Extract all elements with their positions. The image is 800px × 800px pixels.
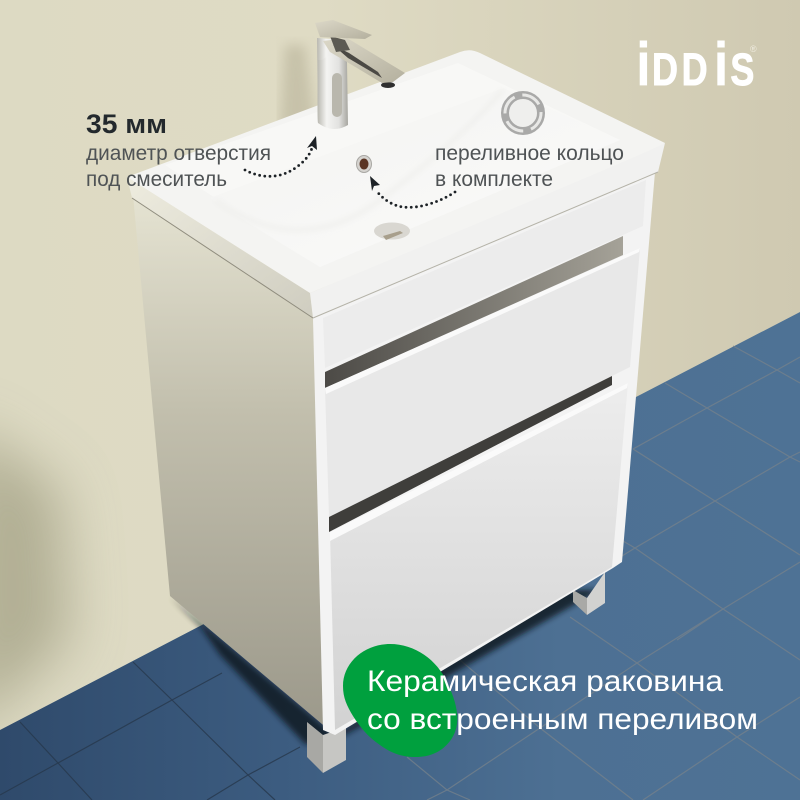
logo: iDDiS: ® [750,44,757,54]
sink rim front face [310,143,665,318]
faucet [315,20,405,129]
headline: со встроенным переливом [367,703,758,736]
faucet shadow on wall [280,45,315,130]
ceramic sink [127,50,665,318]
logo: iDDiS: D [682,44,708,95]
callout: overflow ring: переливное кольцо [435,141,624,165]
front leg [307,722,346,773]
callout: overflow ring: в комплекте [435,167,553,191]
floor with tiles [0,312,800,800]
arrow: to faucet hole [245,136,317,176]
logo: iDDiS: i [637,31,650,98]
upper handle gap [325,236,623,388]
top front panel [323,180,646,368]
cabinet [133,172,655,773]
green blob [343,644,457,757]
caption: faucet hole: диаметр отверстия [86,141,271,165]
heading: 35 mm: 35 мм [86,109,167,139]
arrow: to overflow hole [370,176,455,207]
lower drawer [330,383,628,730]
drain [374,222,410,240]
shadow under cabinet [170,590,600,745]
sink top deck [127,50,665,293]
logo: iDDiS: S [730,44,754,95]
basin [210,88,620,267]
lower handle gap [329,376,612,532]
logo: iDDiS: D [652,44,678,95]
logo: iDDiS: i [714,31,728,98]
overflow ring [505,95,541,131]
cabinet front frame [313,172,655,735]
callout: faucet hole diameter [86,109,271,191]
caption: faucet hole: под смеситель [86,167,227,191]
cabinet side panel [133,195,335,735]
upper drawer [325,248,640,517]
headline: Керамическая раковина [367,665,723,698]
overflow hole [356,156,372,172]
sink rim left face [127,177,313,318]
back right leg [573,572,605,615]
logo: iDDiS [637,31,757,98]
